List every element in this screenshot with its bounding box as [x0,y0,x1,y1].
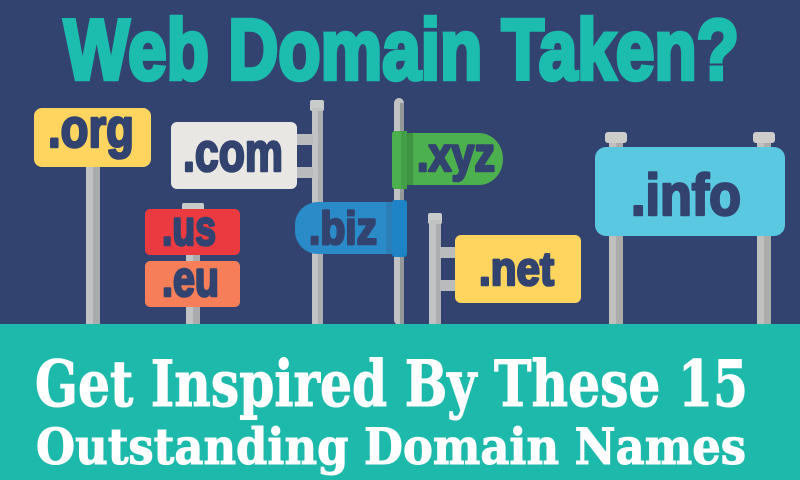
label: .org: .org [48,97,134,159]
flag: .biz [295,200,407,257]
sign: .net [428,213,581,325]
label: .info: .info [631,163,741,228]
sign: .com [171,100,324,325]
signpost: .biz and .xyz [295,98,503,325]
sign: .us and .eu [145,200,240,325]
sign: .info [595,132,785,325]
flag: .biz: .biz [309,202,377,254]
flag: .xyz [392,129,503,189]
footer band [0,324,800,480]
flag: .xyz: .xyz [417,129,495,182]
label: .us: .us [162,200,216,256]
label: .com: .com [183,121,283,183]
label: .net: .net [479,242,554,295]
label: .eu: .eu [162,251,219,307]
sign: .org [34,97,151,325]
